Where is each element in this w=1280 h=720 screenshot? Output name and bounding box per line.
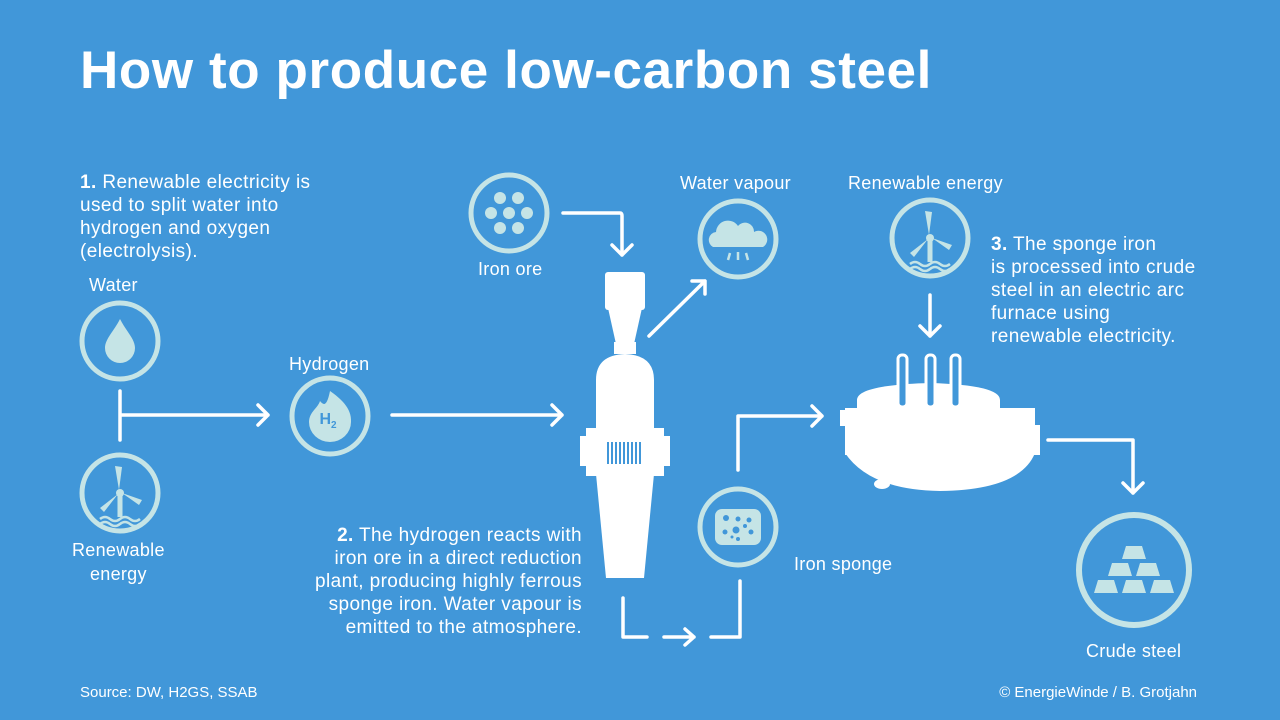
furnace (840, 355, 1040, 491)
label: water vapour: Water vapour (680, 173, 791, 193)
text: step 2 (315, 525, 582, 638)
text: step 2: sponge iron. Water vapour is (329, 594, 582, 615)
label: water: Water (89, 275, 138, 295)
text: step 3: 3. The sponge iron (991, 234, 1156, 255)
label: iron ore: Iron ore (478, 259, 542, 279)
icon: hydrogen (292, 378, 368, 454)
text: step 2: emitted to the atmosphere. (346, 617, 582, 638)
text: step 3: is processed into crude (991, 257, 1196, 278)
source: Source: DW, H2GS, SSAB (80, 684, 258, 701)
icon: crude steel (1079, 515, 1189, 625)
reactor (580, 272, 670, 578)
label: crude steel: Crude steel (1086, 641, 1181, 661)
label: renewable energy left: Renewable (72, 540, 165, 560)
text: step 1: hydrogen and oxygen (80, 218, 270, 239)
text: step 3 (991, 234, 1196, 347)
text: step 2: 2. The hydrogen reacts with (337, 525, 582, 546)
label: renewable energy left (72, 540, 165, 584)
title: How to produce low-carbon steel (80, 41, 932, 100)
credit: © EnergieWinde / B. Grotjahn (999, 684, 1197, 701)
icon: wind turbine left (82, 455, 158, 531)
label: hydrogen: Hydrogen (289, 354, 369, 374)
label: renewable energy top: Renewable energy (848, 173, 1003, 193)
text: step 1 (80, 172, 310, 262)
text: step 3: renewable electricity. (991, 326, 1176, 347)
icon: hydrogen: H (319, 411, 331, 428)
arrows (120, 213, 1143, 645)
text: step 1: (electrolysis). (80, 241, 198, 262)
icon: iron ore (471, 175, 547, 251)
icon: iron sponge (700, 489, 776, 565)
icon: water drop (82, 303, 158, 379)
text: step 1: used to split water into (80, 195, 279, 216)
icon: hydrogen: 2 (331, 420, 337, 431)
label: renewable energy left: energy (90, 564, 147, 584)
icon: wind turbine top (892, 200, 968, 276)
text: step 1: 1. Renewable electricity is (80, 172, 310, 193)
text: step 3: furnace using (991, 303, 1110, 324)
text: step 2: plant, producing highly ferrous (315, 571, 582, 592)
text: step 2: iron ore in a direct reduction (334, 548, 582, 569)
label: iron sponge: Iron sponge (794, 554, 892, 574)
text: step 3: steel in an electric arc (991, 280, 1184, 301)
icon: water vapour (700, 201, 776, 277)
